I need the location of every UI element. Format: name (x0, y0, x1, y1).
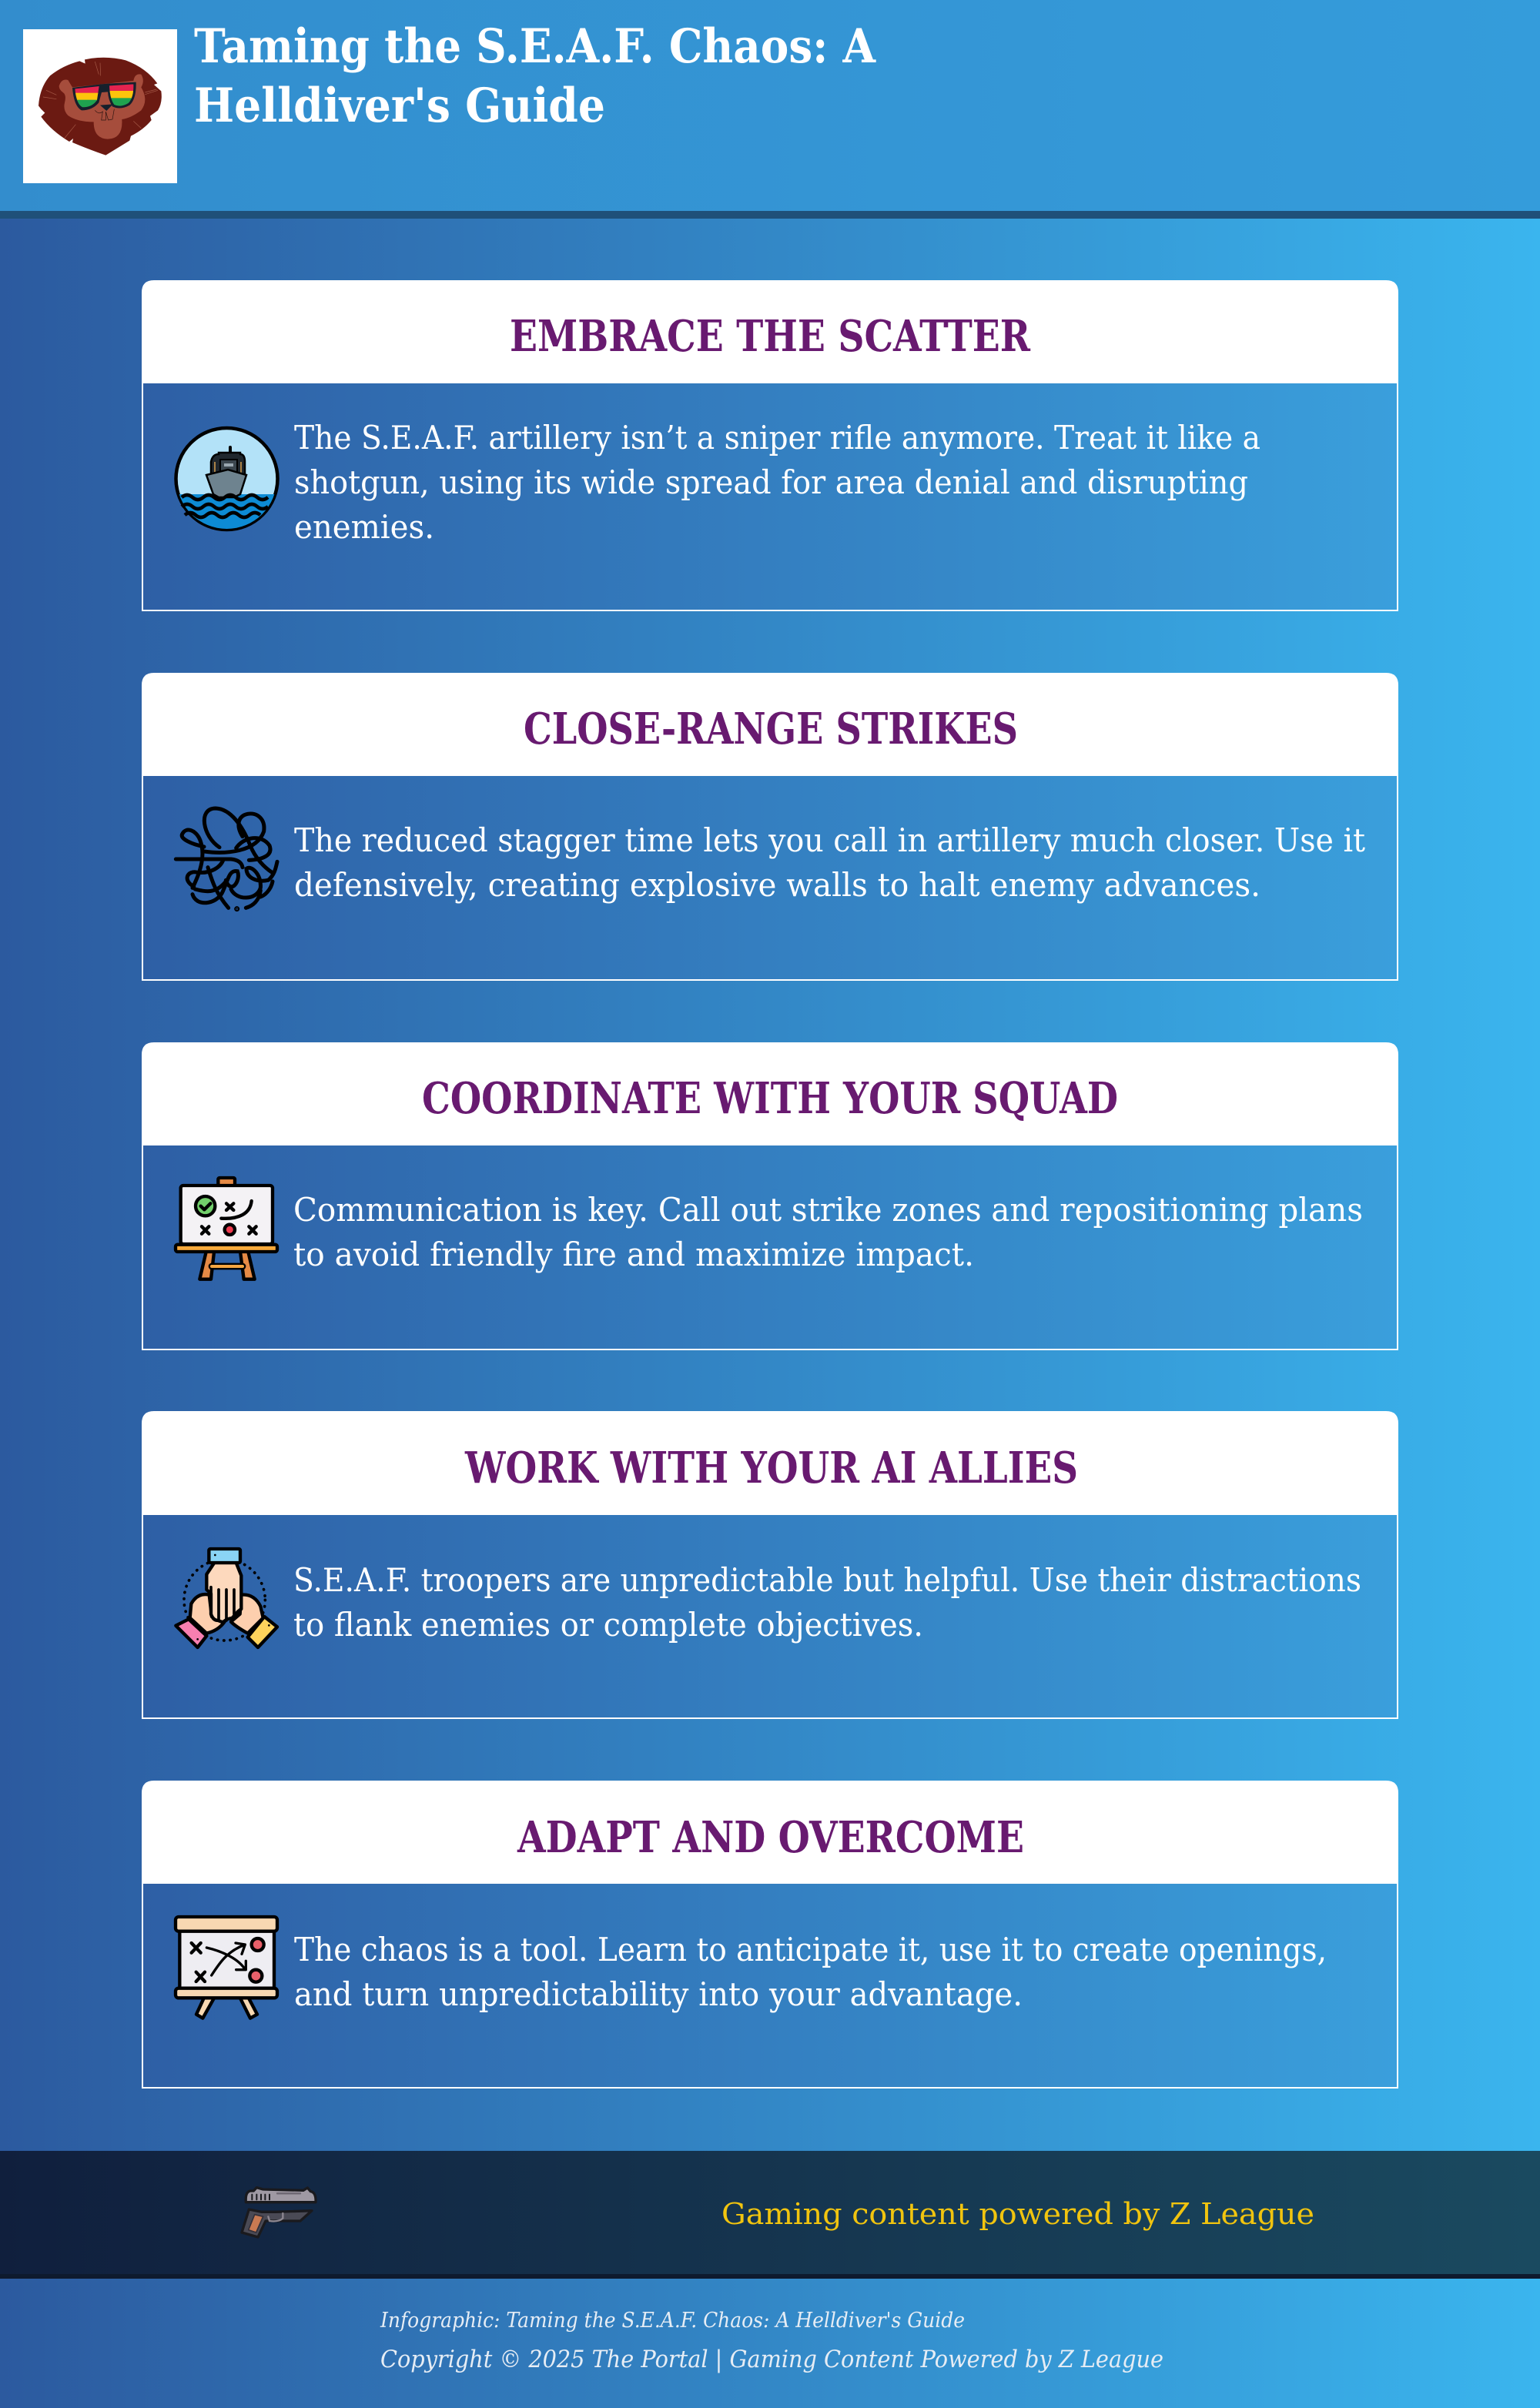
sponsor text: Gaming content powered by Z League (721, 2197, 1314, 2231)
text block: The reduced stagger time lets you call in artillery much closer. Use it (294, 822, 1365, 860)
heading: embrace the scatter (142, 280, 1398, 383)
footer credits (380, 2309, 1163, 2373)
text block: and turn unpredictability into your advantage. (294, 1976, 1023, 2014)
heading: adapt and overcome (142, 1781, 1398, 1884)
title (194, 19, 876, 133)
heading: coordinate with your squad: COORDINATE WITH YOUR SQUAD (422, 1073, 1118, 1124)
heading: close-range strikes: CLOSE-RANGE STRIKES (524, 704, 1018, 754)
text block: The chaos is a tool. Learn to anticipate it, use it to create openings, (294, 1931, 1327, 1969)
heading: close-range strikes (142, 673, 1398, 776)
text block (293, 1192, 1363, 1274)
panel: adapt and overcome (142, 1781, 1398, 2088)
heading: work with your ai allies: WORK WITH YOUR AI ALLIES (464, 1443, 1078, 1493)
icon: strategy board (176, 1917, 277, 2018)
icon: tangled scribble (176, 808, 277, 910)
footer credits: Infographic: Taming the S.E.A.F. Chaos: A Helldiver's Guide (380, 2309, 965, 2333)
title: Taming the S.E.A.F. Chaos: A (194, 19, 876, 74)
icon: ship on waves (174, 428, 282, 540)
panel: embrace the scatter (142, 280, 1398, 610)
text block: defensively, creating explosive walls to halt enemy advances. (294, 867, 1260, 905)
title: Helldiver's Guide (194, 79, 605, 133)
panel: coordinate with your squad (142, 1042, 1398, 1349)
heading: coordinate with your squad (142, 1042, 1398, 1145)
panel: close-range strikes (142, 673, 1398, 980)
header banner (0, 0, 1540, 219)
logo: lion with rainbow sunglasses (23, 29, 177, 183)
text block (294, 822, 1365, 905)
text block (293, 1562, 1361, 1644)
panel: work with your ai allies (142, 1411, 1398, 1718)
text block: Communication is key. Call out strike zones and repositioning plans (293, 1192, 1363, 1229)
icon: three stacked hands (176, 1549, 277, 1647)
icon: tactics easel (176, 1178, 277, 1279)
text block: enemies. (294, 509, 434, 547)
text block (294, 420, 1260, 547)
heading: embrace the scatter: EMBRACE THE SCATTER (510, 311, 1030, 362)
icon: pistol (242, 2188, 316, 2237)
text block: to avoid friendly fire and maximize impact. (293, 1236, 974, 1274)
heading: work with your ai allies (142, 1411, 1398, 1515)
text block: to flank enemies or complete objectives. (293, 1607, 923, 1644)
text block: The S.E.A.F. artillery isn’t a sniper rifle anymore. Treat it like a (294, 420, 1260, 457)
heading: adapt and overcome: ADAPT AND OVERCOME (517, 1812, 1024, 1863)
text block: shotgun, using its wide spread for area denial and disrupting (294, 464, 1248, 502)
sponsor banner (0, 2151, 1540, 2279)
text block: S.E.A.F. troopers are unpredictable but helpful. Use their distractions (293, 1562, 1361, 1600)
footer credits: Copyright © 2025 The Portal | Gaming Content Powered by Z League (380, 2346, 1163, 2373)
text block (294, 1931, 1327, 2014)
